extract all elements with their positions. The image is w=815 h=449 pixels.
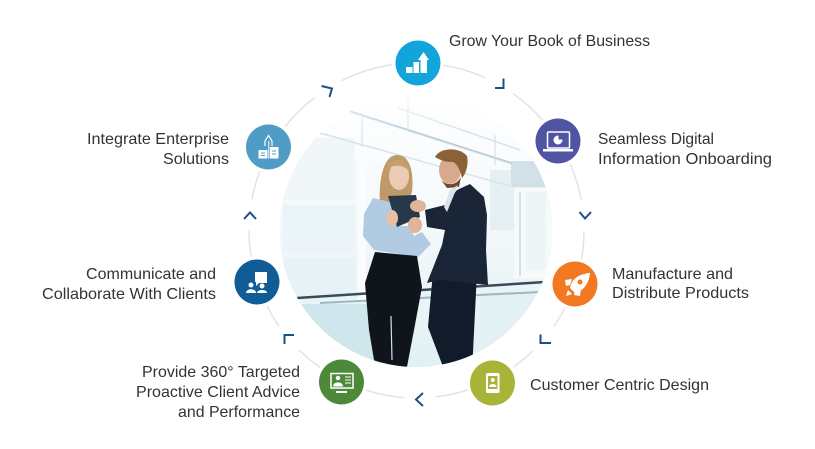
- label: Manufacture and Distribute Products: [612, 266, 749, 302]
- central photo: two business people with a tablet: [275, 90, 560, 372]
- chevron: left: [244, 212, 256, 219]
- label: Communicate and Collaborate With Clients: Collaborate With Clients: [42, 286, 216, 303]
- chevron: right: [580, 212, 591, 218]
- tablet and hands: [386, 195, 426, 233]
- icon: collaborate: [234, 260, 280, 304]
- icon: monitor advice: [319, 360, 364, 404]
- label: Communicate and Collaborate With Clients: [42, 266, 216, 303]
- window panes: [283, 95, 553, 364]
- icon: laptop: [536, 118, 580, 164]
- label: Seamless Digital Information Onboarding: [598, 131, 772, 168]
- label: Manufacture and Distribute Products: Manufacture and: [612, 266, 733, 283]
- man: [425, 149, 488, 372]
- icon: grow chart: [396, 40, 440, 86]
- label: Provide 360° Targeted Proactive Client Advice and Performance: [136, 364, 300, 421]
- chevron: lower left: [284, 335, 294, 344]
- label: Integrate Enterprise Solutions: Integrate Enterprise: [87, 131, 229, 148]
- label: Customer Centric Design: Customer Centric Design: [530, 377, 709, 394]
- chevron: bottom: [416, 393, 423, 406]
- label: Grow Your Book of Business: Grow Your Book of Business: [449, 33, 650, 50]
- icon: enterprise buildings: [246, 124, 291, 170]
- label: Seamless Digital Information Onboarding: Information Onboarding: [598, 151, 772, 168]
- icon: mobile user: [470, 360, 515, 406]
- label: Provide 360° Targeted Proactive Client Advice and Performance: Provide 360° Targeted: [142, 364, 300, 381]
- ring connecting the steps: [231, 37, 601, 415]
- woman: [363, 155, 431, 372]
- chevron: top left: [322, 86, 332, 97]
- label: Integrate Enterprise Solutions: [87, 131, 229, 168]
- label: Integrate Enterprise Solutions: Solutions: [163, 151, 229, 168]
- handrail: [297, 282, 545, 303]
- label: Provide 360° Targeted Proactive Client Advice and Performance: and Performance: [178, 404, 300, 421]
- label: Seamless Digital Information Onboarding: Seamless Digital: [598, 131, 714, 148]
- chevron: top right: [495, 78, 504, 88]
- label: Provide 360° Targeted Proactive Client Advice and Performance: Proactive Client Advice: [136, 384, 300, 401]
- icon: rocket: [552, 262, 598, 306]
- label: Communicate and Collaborate With Clients: Communicate and: [86, 266, 216, 283]
- chevron: lower right: [540, 334, 551, 343]
- label: Manufacture and Distribute Products: Distribute Products: [612, 285, 749, 302]
